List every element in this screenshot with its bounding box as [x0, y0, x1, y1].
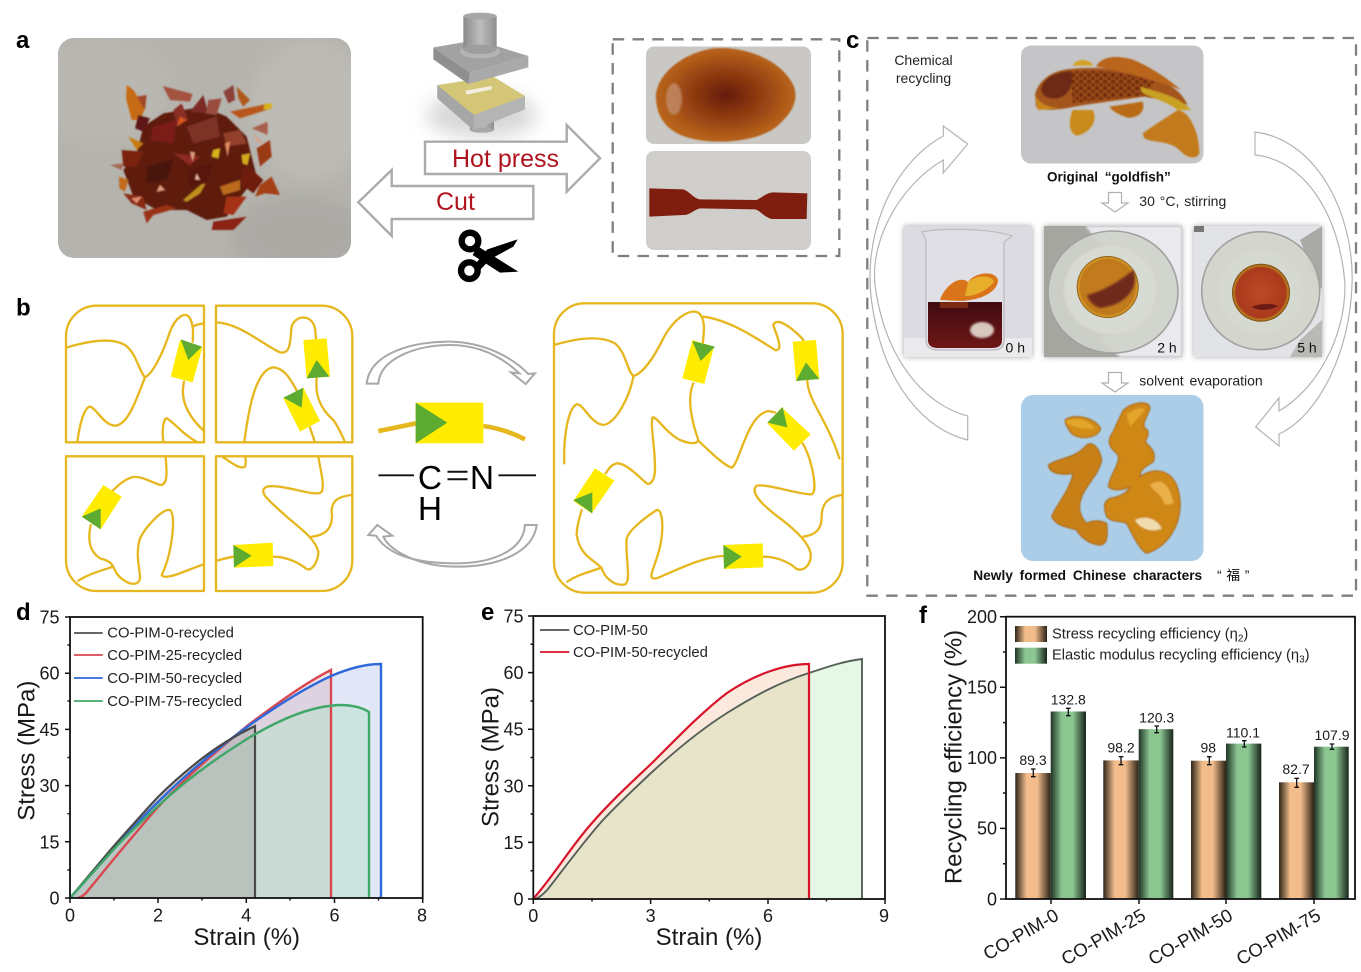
bar chart: recycling efficiency: 150 — [967, 678, 997, 698]
chart: pristine and recycled curves: Stress (MPa) — [478, 687, 504, 827]
text: chemical recycling: Chemical — [894, 52, 953, 68]
bar chart: recycling efficiency: 98 — [1201, 740, 1216, 756]
arrow: hot press — [425, 125, 600, 192]
arrow: left circular arrow — [870, 126, 968, 440]
icon: scissors — [461, 233, 518, 279]
diagram: healed network — [554, 303, 843, 593]
chart: recycled stress-strain curves: Strain (%) — [193, 924, 300, 951]
caption: original goldfish: Original “goldfish” — [1047, 170, 1171, 185]
arrow: cut: Cut — [436, 188, 475, 216]
chart: pristine and recycled curves: 3 — [646, 906, 656, 926]
legend: panel d: CO-PIM-50-recycled — [107, 671, 242, 687]
label a: a — [16, 27, 30, 54]
chart: recycled stress-strain curves: 4 — [241, 906, 251, 926]
photo: dish at 2 h — [1044, 226, 1182, 357]
text: solvent evaporation: solvent evaporation — [1139, 372, 1263, 388]
legend: panel e: CO-PIM-50-recycled — [573, 645, 708, 661]
chemical formula: imine bond: C — [418, 460, 442, 497]
chemical formula: imine bond: H — [418, 491, 442, 528]
label: 5 h: 5 h — [1297, 340, 1317, 356]
chart: pristine and recycled curves: 15 — [503, 833, 524, 853]
photo: original goldfish — [1021, 46, 1204, 164]
bar chart: recycling efficiency: 100 — [967, 748, 997, 768]
chart: recycled stress-strain curves: 6 — [329, 906, 340, 926]
arrow: reverse bond exchange — [368, 525, 537, 567]
dashed frame — [867, 38, 1356, 596]
text: chemical recycling: recycling — [896, 70, 951, 86]
bar chart: recycling efficiency: 200 — [967, 607, 997, 627]
label c: c — [846, 27, 859, 54]
legend: panel f: Stress recycling efficiency (η — [1052, 626, 1238, 642]
label: 2 h: 2 h — [1157, 340, 1177, 356]
diagram: four broken network pieces — [66, 306, 352, 591]
arrow: evaporation step — [1102, 372, 1128, 392]
bar chart: recycling efficiency: 0 — [987, 889, 997, 909]
chart: recycled stress-strain curves: 0 — [49, 888, 60, 908]
arrow: forward bond exchange — [367, 342, 535, 384]
icon: imine linker on chain — [378, 403, 525, 443]
chart: recycled stress-strain curves: 2 — [153, 906, 163, 926]
label d: d — [16, 599, 31, 626]
panel f: recycling efficiency — [919, 602, 1355, 969]
panel a: hot press and cut recycling — [16, 13, 839, 279]
bar chart: recycling efficiency: 82.7 — [1282, 761, 1310, 777]
label e: e — [481, 599, 494, 626]
chart: pristine and recycled curves — [478, 606, 889, 951]
bar chart: recycling efficiency — [940, 607, 1355, 969]
chart: pristine and recycled curves: 6 — [763, 906, 773, 926]
photo: newly formed character — [1021, 395, 1204, 561]
bar chart: recycling efficiency: 98.2 — [1107, 740, 1135, 756]
photo: cut film flakes — [58, 38, 351, 258]
chart: pristine and recycled curves: 30 — [503, 776, 524, 796]
chart: pristine and recycled curves: 9 — [879, 906, 889, 926]
bar chart: recycling efficiency: 132.8 — [1051, 691, 1086, 707]
text: chemical recycling — [894, 52, 953, 86]
chart: recycled stress-strain curves — [14, 608, 427, 951]
label: 0 h: 0 h — [1006, 340, 1025, 356]
text: stirring: 30 °C, stirring — [1139, 193, 1226, 209]
photo: dog-bone specimen — [646, 151, 811, 250]
bar chart: recycling efficiency: 89.3 — [1019, 752, 1047, 768]
legend: panel f: Elastic modulus recycling efficiency (η — [1052, 648, 1299, 664]
panel b: dynamic imine network — [16, 294, 843, 593]
bar chart: recycling efficiency: CO-PIM-25 — [1057, 904, 1149, 969]
chart: recycled stress-strain curves: 45 — [39, 720, 60, 740]
chemical formula: imine bond: N — [470, 460, 494, 497]
bar chart: recycling efficiency: CO-PIM-75 — [1232, 904, 1324, 969]
chart: recycled stress-strain curves: 15 — [39, 832, 60, 852]
chart: recycled stress-strain curves: 75 — [39, 608, 60, 628]
legend: panel e: CO-PIM-50 — [573, 623, 648, 639]
chart: recycled stress-strain curves: 60 — [39, 664, 60, 684]
chart: recycled stress-strain curves: 8 — [417, 906, 427, 926]
chart: pristine and recycled curves: 0 — [528, 906, 538, 926]
chart: pristine and recycled curves: 45 — [503, 720, 524, 740]
bar chart: recycling efficiency: 107.9 — [1314, 727, 1350, 743]
chart: recycled stress-strain curves: Stress (MPa) — [14, 681, 40, 821]
label b: b — [16, 294, 31, 322]
photo: dish at 5 h — [1194, 226, 1322, 357]
photo: beaker at 0 h — [904, 226, 1032, 357]
chemical formula: imine bond — [378, 460, 536, 528]
chart: pristine and recycled curves: 60 — [503, 663, 524, 683]
bar chart: recycling efficiency: Recycling efficiency (%) — [940, 630, 968, 884]
legend: panel d: CO-PIM-25-recycled — [107, 648, 242, 664]
photo: pressed film — [646, 46, 811, 144]
bar chart: recycling efficiency: CO-PIM-0 — [979, 904, 1062, 964]
chart: pristine and recycled curves: 0 — [513, 890, 524, 910]
chart: pristine and recycled curves: 75 — [503, 606, 524, 626]
arrow: right circular arrow — [1255, 132, 1352, 446]
bar chart: recycling efficiency: 110.1 — [1226, 724, 1260, 740]
legend: panel f: ) — [1243, 626, 1248, 642]
bar chart: recycling efficiency: 120.3 — [1139, 709, 1174, 725]
caption: newly formed characters: Newly formed Chinese characters “ 福 ” — [973, 568, 1250, 583]
chart: pristine and recycled curves: Strain (%) — [656, 924, 762, 951]
label f: f — [919, 602, 928, 629]
legend: panel d — [74, 626, 242, 710]
legend: panel d: CO-PIM-75-recycled — [107, 694, 242, 710]
legend: panel f: ) — [1305, 648, 1310, 664]
legend: panel d: CO-PIM-0-recycled — [107, 626, 234, 642]
legend: panel f: 2 — [1238, 634, 1244, 644]
icon: hot press mould — [427, 13, 537, 138]
legend: panel f — [1015, 626, 1310, 666]
panel e: pristine versus recycled — [478, 599, 889, 951]
chart: recycled stress-strain curves: 30 — [39, 776, 60, 796]
arrow: hot press: Hot press — [452, 145, 559, 173]
dashed box: pressed film and dog-bone specimen — [613, 39, 839, 256]
legend: panel f: 3 — [1299, 654, 1305, 666]
chart: recycled stress-strain curves: 0 — [65, 906, 75, 926]
bar chart: recycling efficiency: CO-PIM-50 — [1144, 904, 1236, 969]
arrow: cut — [358, 170, 533, 236]
legend: panel e — [540, 623, 708, 661]
panel d: stress-strain of recycled films — [14, 599, 427, 951]
bar chart: recycling efficiency: 50 — [977, 819, 997, 839]
arrow: stirring step — [1102, 192, 1128, 212]
panel c: chemical recycling — [846, 27, 1356, 596]
